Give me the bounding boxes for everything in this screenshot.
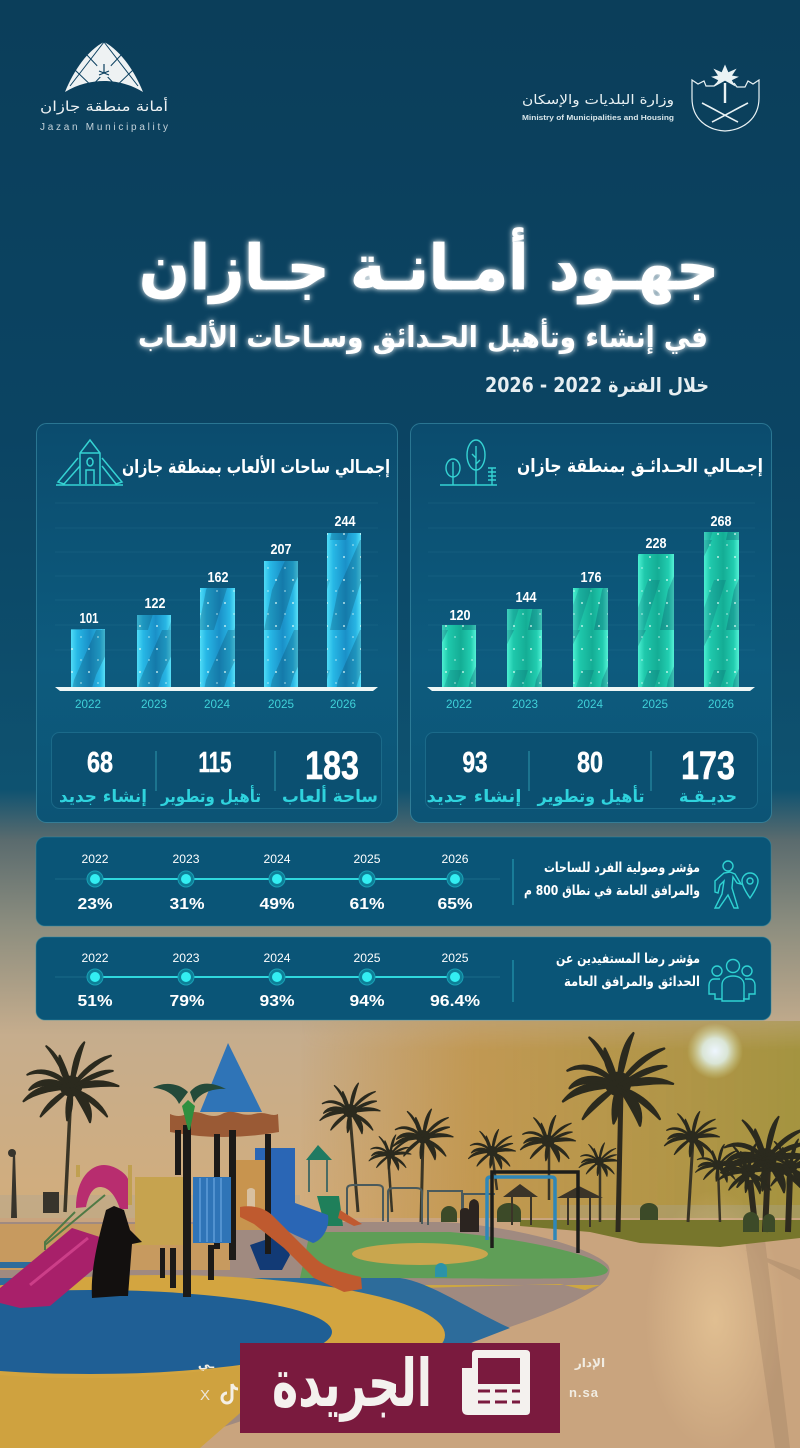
social icons: X [200,1387,210,1404]
timeline: satisfaction: 94% [350,993,384,1010]
banner text: الجريدة [272,1345,432,1422]
summary: parks: حديـقـة [679,787,737,807]
gazebos [503,1184,603,1198]
icon: playground [56,440,123,485]
title: جهـود أمـانـة جـازان [139,227,719,304]
sky [320,1021,800,1218]
panel: satisfaction index [36,937,771,1020]
summary: parks: 80 [577,747,603,779]
bar values: 244 [334,513,356,530]
timeline: satisfaction: 96.4% [430,993,480,1010]
sun [687,1023,743,1079]
timeline: accessibility: 23% [78,896,112,913]
timeline: satisfaction: 2024 [264,951,291,965]
timeline: accessibility: 2023 [172,852,200,866]
bar values: 228 [646,535,666,552]
icon: newspaper [462,1350,530,1415]
year labels: 2024 [204,697,230,711]
summary: playgrounds: ساحة ألعاب [282,785,378,807]
summary: parks: 93 [462,747,488,779]
year labels: 2022 [75,697,101,711]
bar values: 144 [516,589,537,606]
icon: walker and pin [715,861,758,908]
tower cone roof [200,1043,262,1112]
timeline: satisfaction [55,951,500,1010]
bar values [450,513,732,624]
timeline: accessibility: 2022 [82,852,109,866]
ministry name english: Ministry of Municipalities and Housing [522,115,674,122]
name arabic: أمانة منطقة جازان [40,97,168,115]
background palms [23,1033,800,1232]
tropical tree decoration [182,1100,195,1130]
watermark banner [240,1343,560,1433]
timeline: satisfaction: 2025 [354,951,381,965]
bar chart: playgrounds [55,513,378,711]
year labels: 2023 [141,697,167,711]
period: خلال الفترة 2022 - 2026 [485,373,709,397]
timeline: satisfaction: 2025 [442,951,469,965]
summary: playgrounds: تأهيل وتطوير [160,785,261,807]
footer text: الإدار [574,1356,605,1370]
bar values: 162 [208,569,228,586]
bar values: 120 [450,607,470,624]
timeline: satisfaction: 93% [260,993,294,1010]
icon: trees [440,440,497,485]
lamp post and bin [11,1152,59,1218]
visitor in black [92,1206,142,1298]
grid lines [428,503,755,650]
bar values: 101 [80,610,98,627]
ministry name arabic: وزارة البلديات والإسكان [522,93,674,108]
icon: lattice dome [65,42,143,92]
year labels: 2025 [642,697,668,711]
summary: playgrounds: 68 [87,747,113,779]
summary: playgrounds: 183 [305,744,359,788]
pink arch [76,1165,128,1209]
blue tube slide [255,1148,328,1243]
summary: parks: تأهيل وتطوير [537,785,644,807]
year labels [75,697,356,711]
footer remnants [198,1356,605,1404]
label: accessibility: والمرافق العامة في نطاق 800 م [524,883,700,899]
jazan municipality logo [40,42,168,133]
bar values: 207 [270,541,292,558]
summary: parks: 173 [681,744,735,788]
summary: playgrounds [52,732,382,808]
timeline: accessibility [55,852,500,913]
yellow panel [135,1177,183,1245]
visitors [460,1199,479,1232]
icon: people group [709,960,755,1001]
grid lines [55,503,378,650]
icon: ministry emblem [692,66,759,131]
bar chart: parks [427,513,755,711]
panel: parks [410,424,772,822]
label: accessibility [524,860,700,899]
timeline: accessibility: 61% [350,896,384,913]
year labels: 2023 [512,697,538,711]
tower posts [160,1125,271,1297]
timeline: accessibility: 2024 [264,852,291,866]
orange slide [240,1206,362,1292]
label: satisfaction [556,951,700,990]
heading: playgrounds total: إجمـالي ساحات الألعاب بمنطقة جازان [122,455,390,478]
footer text [198,1356,605,1400]
green rail [45,1195,105,1250]
sea [0,1195,800,1222]
blue fence [193,1177,231,1243]
swings [347,1172,578,1253]
timeline: satisfaction: 2023 [172,951,200,965]
footer text: ـي [198,1357,215,1371]
subtitle: في إنشاء وتأهيل الحـدائق وسـاحات الألعـاب [138,318,708,355]
timeline: accessibility: 2026 [442,852,469,866]
footer text: n.sa [569,1385,599,1400]
shrubs [441,1203,775,1232]
timeline: accessibility: 2025 [354,852,381,866]
bar values [80,513,356,627]
summary: playgrounds: 115 [198,747,232,779]
bar values: 268 [710,513,732,530]
orange panel [236,1160,265,1230]
timeline: satisfaction: 2022 [82,951,109,965]
ground [0,1218,800,1448]
bar values: 176 [580,569,602,586]
label: accessibility: مؤشر وصولية الفرد للساحات [544,860,700,876]
panel: accessibility index [36,837,771,926]
label: satisfaction: الحدائق والمرافق العامة [564,974,700,990]
tower brim [170,1112,279,1137]
timeline: accessibility: 65% [438,896,472,913]
summary: parks: إنشاء جديد [426,787,522,807]
timeline: accessibility: 31% [170,896,204,913]
year labels [446,697,734,711]
name english: Jazan Municipality [40,122,168,133]
palm shadows [745,1240,800,1448]
icon: tiktok [222,1384,238,1403]
tube slide base [250,1235,290,1270]
year labels: 2025 [268,697,294,711]
summary: playgrounds: إنشاء جديد [59,787,147,807]
toy [435,1263,447,1277]
small turret [306,1145,362,1226]
year labels: 2026 [330,697,356,711]
year labels: 2024 [577,697,603,711]
grass [520,1220,800,1247]
timeline: satisfaction: 79% [170,993,204,1010]
palm leaves on tower [153,1084,226,1104]
photo: seaside playground at sunset [0,1021,800,1448]
timeline: accessibility: 49% [260,896,294,913]
label: satisfaction: مؤشر رضا المستفيدين عن [556,951,700,967]
panel: playgrounds [36,424,398,822]
summary: parks [426,732,758,808]
pink slide [0,1228,103,1308]
play surface [0,1222,610,1448]
year labels: 2022 [446,697,472,711]
bar values: 122 [144,595,166,612]
ministry logo [522,66,759,131]
timeline: satisfaction: 51% [78,993,112,1010]
year labels: 2026 [708,697,734,711]
